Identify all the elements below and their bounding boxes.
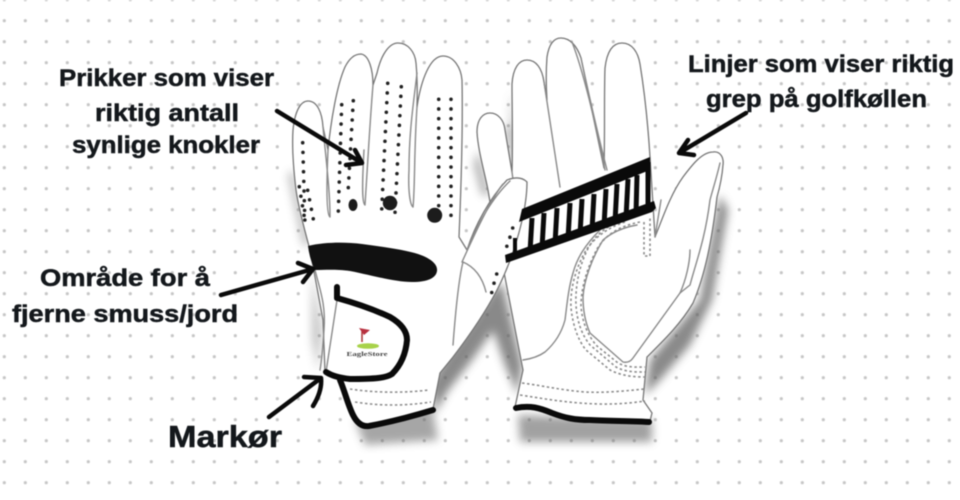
label line 2: riktig antall <box>95 100 239 127</box>
logo green <box>357 343 379 349</box>
ring finger dots <box>338 105 342 212</box>
label: grip lines <box>688 51 954 113</box>
logo <box>346 328 388 358</box>
grip lines <box>530 162 648 252</box>
glove shadows <box>288 85 728 445</box>
dirt removal area <box>308 243 437 282</box>
grip band <box>505 157 656 263</box>
thumb dots <box>492 228 513 293</box>
velcro strap <box>326 287 407 379</box>
left side seam <box>315 270 337 372</box>
cuff hem <box>340 380 433 426</box>
palm patch inner line <box>583 225 690 362</box>
index finger dots <box>437 99 441 207</box>
palm stitching <box>576 218 645 372</box>
knuckle dot: middle <box>383 196 397 210</box>
right glove (palm side) <box>477 38 723 422</box>
arrow: dots <box>277 111 362 165</box>
thumb tab stitching <box>644 218 650 256</box>
logo flag <box>361 329 363 342</box>
label line 2: fjerne smuss/jord <box>12 301 238 328</box>
label line 1: Område for å <box>40 265 211 292</box>
upper band <box>519 157 650 222</box>
knuckle dot: ring <box>348 199 358 211</box>
label line 1: Linjer som viser riktig <box>688 51 954 78</box>
finger seams <box>512 42 607 210</box>
thumb seam <box>453 181 510 345</box>
thumb seam <box>655 163 720 293</box>
label line 2: grep på golfkøllen <box>706 86 927 113</box>
right glove outline <box>477 38 723 422</box>
grip marker <box>513 238 517 252</box>
knuckle dot: index <box>427 208 442 223</box>
logo name: EagleStore <box>346 352 388 358</box>
wrist stitching <box>522 383 644 392</box>
middle finger dots <box>382 83 388 210</box>
label: dots <box>59 65 274 159</box>
arrow: marker <box>269 377 321 417</box>
cuff hem <box>516 407 649 422</box>
label line 1: Prikker som viser <box>59 65 274 92</box>
finger gaps <box>323 73 417 217</box>
left glove (back side) <box>293 43 527 427</box>
arrow: grip lines <box>679 113 746 155</box>
arrow: dirt area <box>221 263 313 295</box>
pinky dots <box>303 143 305 225</box>
label line 3: synlige knokler <box>72 132 260 159</box>
label: dirt area <box>12 265 238 328</box>
lower band <box>505 201 656 263</box>
left glove outline <box>293 43 527 427</box>
palm patch outer line <box>523 230 600 360</box>
finger dots <box>299 83 451 225</box>
label: marker: Markør <box>168 419 282 454</box>
wrist stitching <box>350 389 429 392</box>
